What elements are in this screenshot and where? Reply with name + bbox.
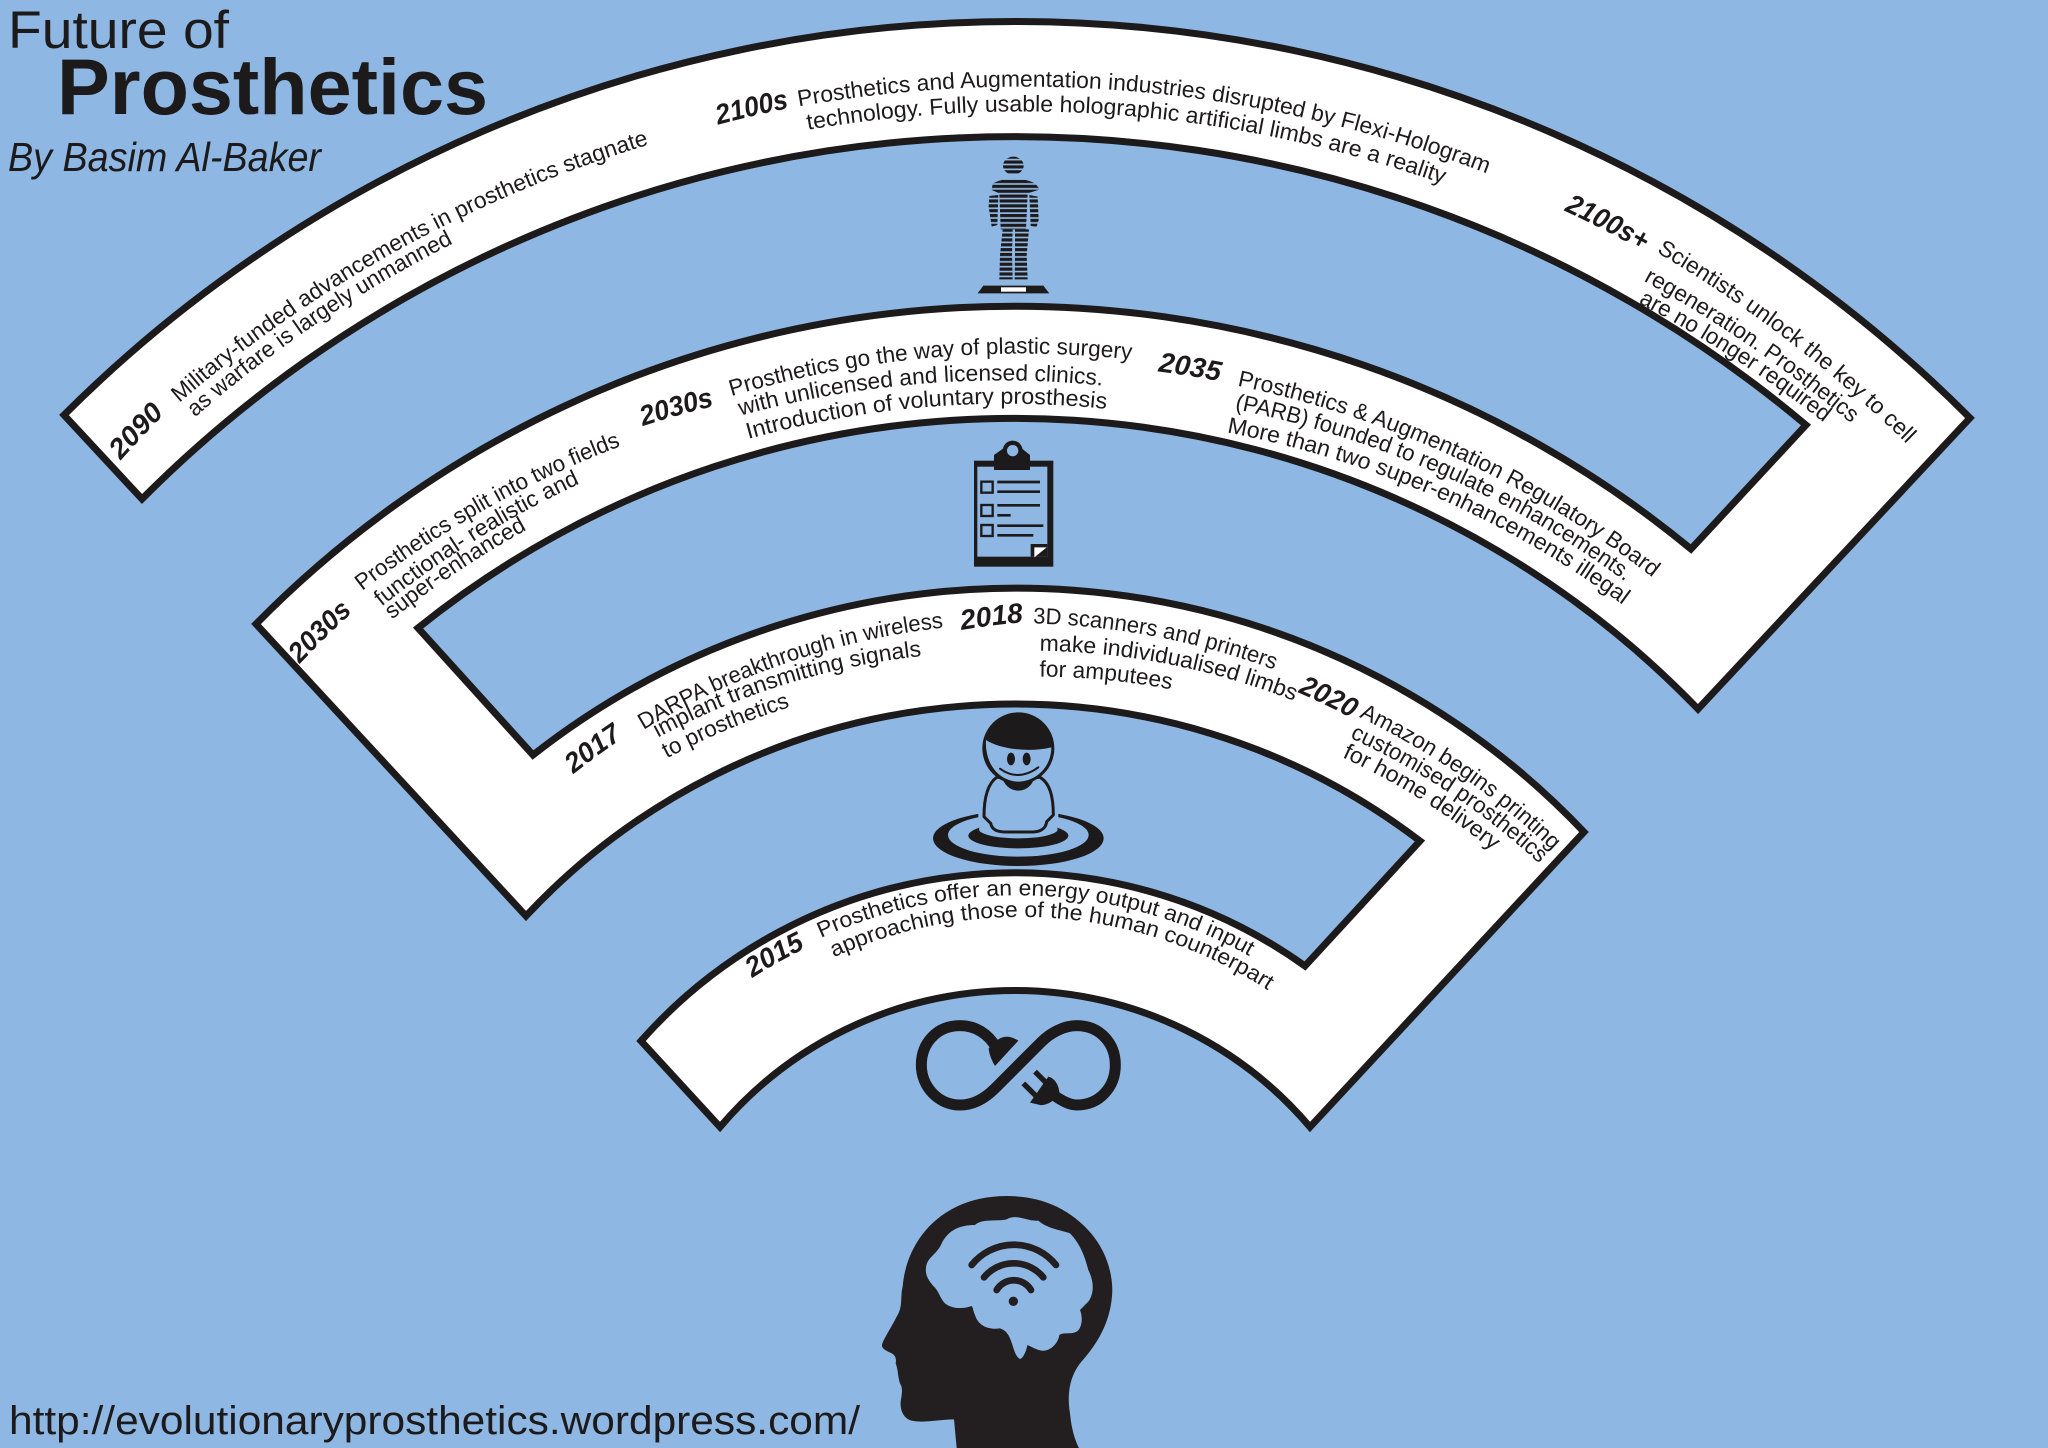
milestone 2030s centre: Introduction of voluntary prosthesis — [746, 388, 1106, 438]
outer band text — [110, 71, 1918, 461]
milestone 2035: Prosthetics & Augmentation Regulatory Board — [1239, 370, 1662, 577]
title: Prosthetics — [57, 42, 488, 131]
milestone 2100s: Prosthetics and Augmentation industries disrupted by Flexi-Hologram — [798, 71, 1489, 173]
milestone 2018: 2018 — [961, 603, 1022, 630]
second band text — [290, 337, 1662, 664]
milestone 2015: Prosthetics offer an energy output and input — [816, 883, 1255, 956]
milestone 2017: implant transmitting signals — [652, 641, 920, 737]
milestone 2018: for amputees — [1040, 660, 1172, 689]
milestone 2100s+: regeneration. Prosthetics — [1644, 271, 1857, 422]
title — [8, 1, 488, 131]
milestone 2090: 2090 — [110, 402, 160, 461]
milestone 2017: to prosthetics — [662, 696, 788, 757]
website url: http://evolutionaryprosthetics.wordpress.com/ — [9, 1399, 861, 1443]
milestone 2030s left: Prosthetics split into two fields — [354, 435, 620, 590]
milestone 2030s centre — [640, 337, 1133, 438]
author byline: By Basim Al-Baker — [8, 134, 323, 180]
title: Future of — [8, 1, 229, 60]
milestone 2020: 2020 — [1298, 677, 1359, 716]
milestone 2020 — [1298, 677, 1560, 862]
serpentine wifi-shaped timeline band — [64, 21, 1970, 1127]
icon: infinity loop with plug — [921, 1026, 1115, 1105]
milestone 2030s centre: with unlicensed and licensed clinics. — [738, 364, 1101, 415]
icon: striped human figure on plinth — [978, 157, 1049, 293]
milestone 2035: 2035 — [1158, 353, 1224, 380]
milestone 2015: 2015 — [746, 931, 802, 978]
milestone 2030s left — [290, 435, 620, 664]
milestone 2018 — [961, 603, 1296, 700]
milestone 2017 — [566, 616, 942, 774]
milestone 2015: approaching those of the human counterpart — [832, 902, 1274, 990]
timeline text — [110, 71, 1918, 990]
milestone 2090: Military-funded advancements in prosthetics stagnate — [170, 134, 647, 402]
milestone 2020: customised prosthetics — [1352, 728, 1546, 862]
milestone 2100s+: are no longer required — [1640, 294, 1833, 422]
icon: clipboard checklist — [974, 441, 1053, 567]
milestone 2017: DARPA breakthrough in wireless — [637, 616, 942, 729]
milestone 2030s centre: 2030s — [640, 392, 712, 426]
third band text — [566, 603, 1560, 862]
milestone 2020: Amazon begins printing — [1359, 706, 1560, 852]
icon: head silhouette with wifi brain — [882, 1196, 1112, 1448]
milestone 2020: for home delivery — [1344, 744, 1500, 850]
milestone 2100s+: Scientists unlock the key to cell — [1658, 241, 1918, 443]
milestone 2030s centre: Prosthetics go the way of plastic surgery — [728, 337, 1133, 396]
milestone 2100s+: 2100s+ — [1564, 196, 1648, 246]
milestone 2100s+ — [1564, 196, 1918, 443]
icon: smiling figure rising from rings — [933, 712, 1104, 866]
milestone 2035: More than two super-enhancements illegal — [1228, 417, 1632, 604]
milestone 2100s: 2100s — [716, 92, 787, 125]
milestone 2100s: technology. Fully usable holographic artificial limbs are a reality — [806, 95, 1447, 186]
milestone 2018: 3D scanners and printers — [1034, 608, 1276, 668]
milestone 2017: 2017 — [566, 722, 616, 774]
milestone 2090: as warfare is largely unmanned — [190, 229, 452, 416]
milestone 2018: make individualised limbs — [1041, 636, 1296, 700]
milestone 2030s left: functional- realistic and — [374, 469, 579, 606]
milestone 2030s left: super-enhanced — [386, 516, 526, 618]
milestone 2035: (PARB) founded to regulate enhancements. — [1236, 394, 1626, 580]
milestone 2030s left: 2030s — [290, 603, 350, 664]
